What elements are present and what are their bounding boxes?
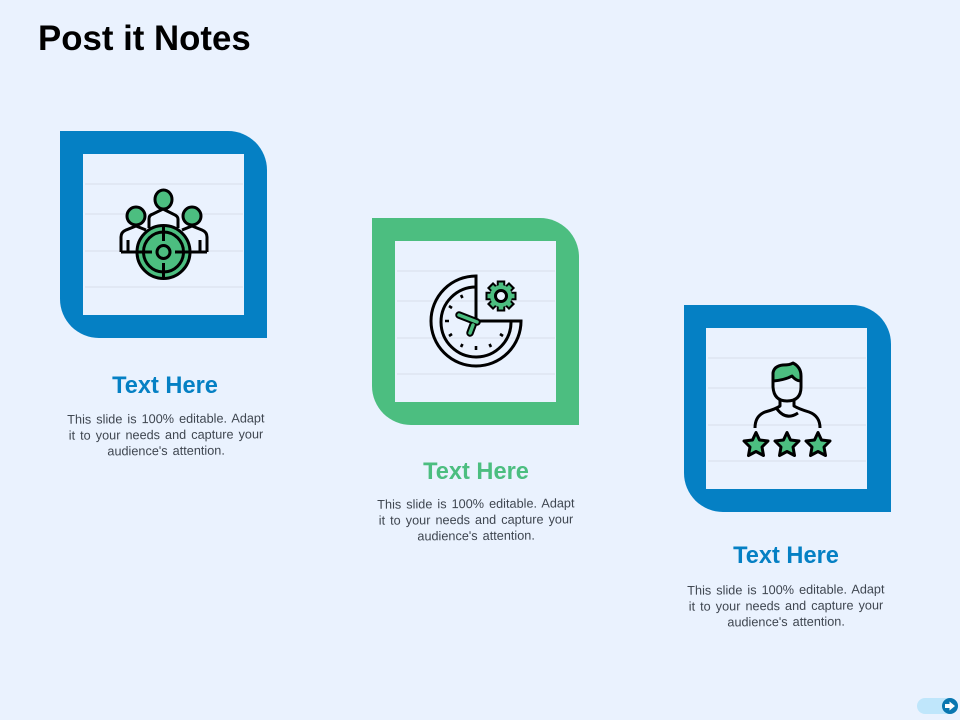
text: note 1 body: This slide is 100% editable. Adapt bbox=[67, 411, 265, 427]
text: note 2 body bbox=[377, 496, 575, 543]
icon: clock and gear bbox=[431, 276, 521, 366]
text: note 1 body: it to your needs and capture your bbox=[69, 427, 263, 443]
heading: note 1: Text Here bbox=[112, 373, 218, 399]
text: note 1 body bbox=[67, 411, 265, 458]
panel: note 1 frame bbox=[60, 131, 267, 338]
text: note 3 body: it to your needs and capture your bbox=[689, 598, 883, 614]
text: note 1 body: audience's attention. bbox=[107, 444, 225, 458]
title: Post it Notes bbox=[38, 19, 251, 58]
text: note 2 body: audience's attention. bbox=[417, 529, 535, 543]
icon: person with three stars bbox=[744, 363, 830, 456]
heading: note 2: Text Here bbox=[423, 459, 529, 485]
heading: note 3: Text Here bbox=[733, 543, 839, 569]
text: note 3 body: audience's attention. bbox=[727, 615, 845, 629]
panel: note 3 frame bbox=[684, 305, 891, 512]
text: note 2 body: it to your needs and capture your bbox=[379, 512, 573, 528]
text: note 2 body: This slide is 100% editable. Adapt bbox=[377, 496, 575, 512]
text: note 3 body: This slide is 100% editable. Adapt bbox=[687, 582, 885, 598]
panel: note 2 frame bbox=[372, 218, 579, 425]
text: note 3 body bbox=[687, 582, 885, 629]
icon: team and target bbox=[121, 190, 207, 278]
icon: next arrow button bbox=[917, 698, 958, 714]
